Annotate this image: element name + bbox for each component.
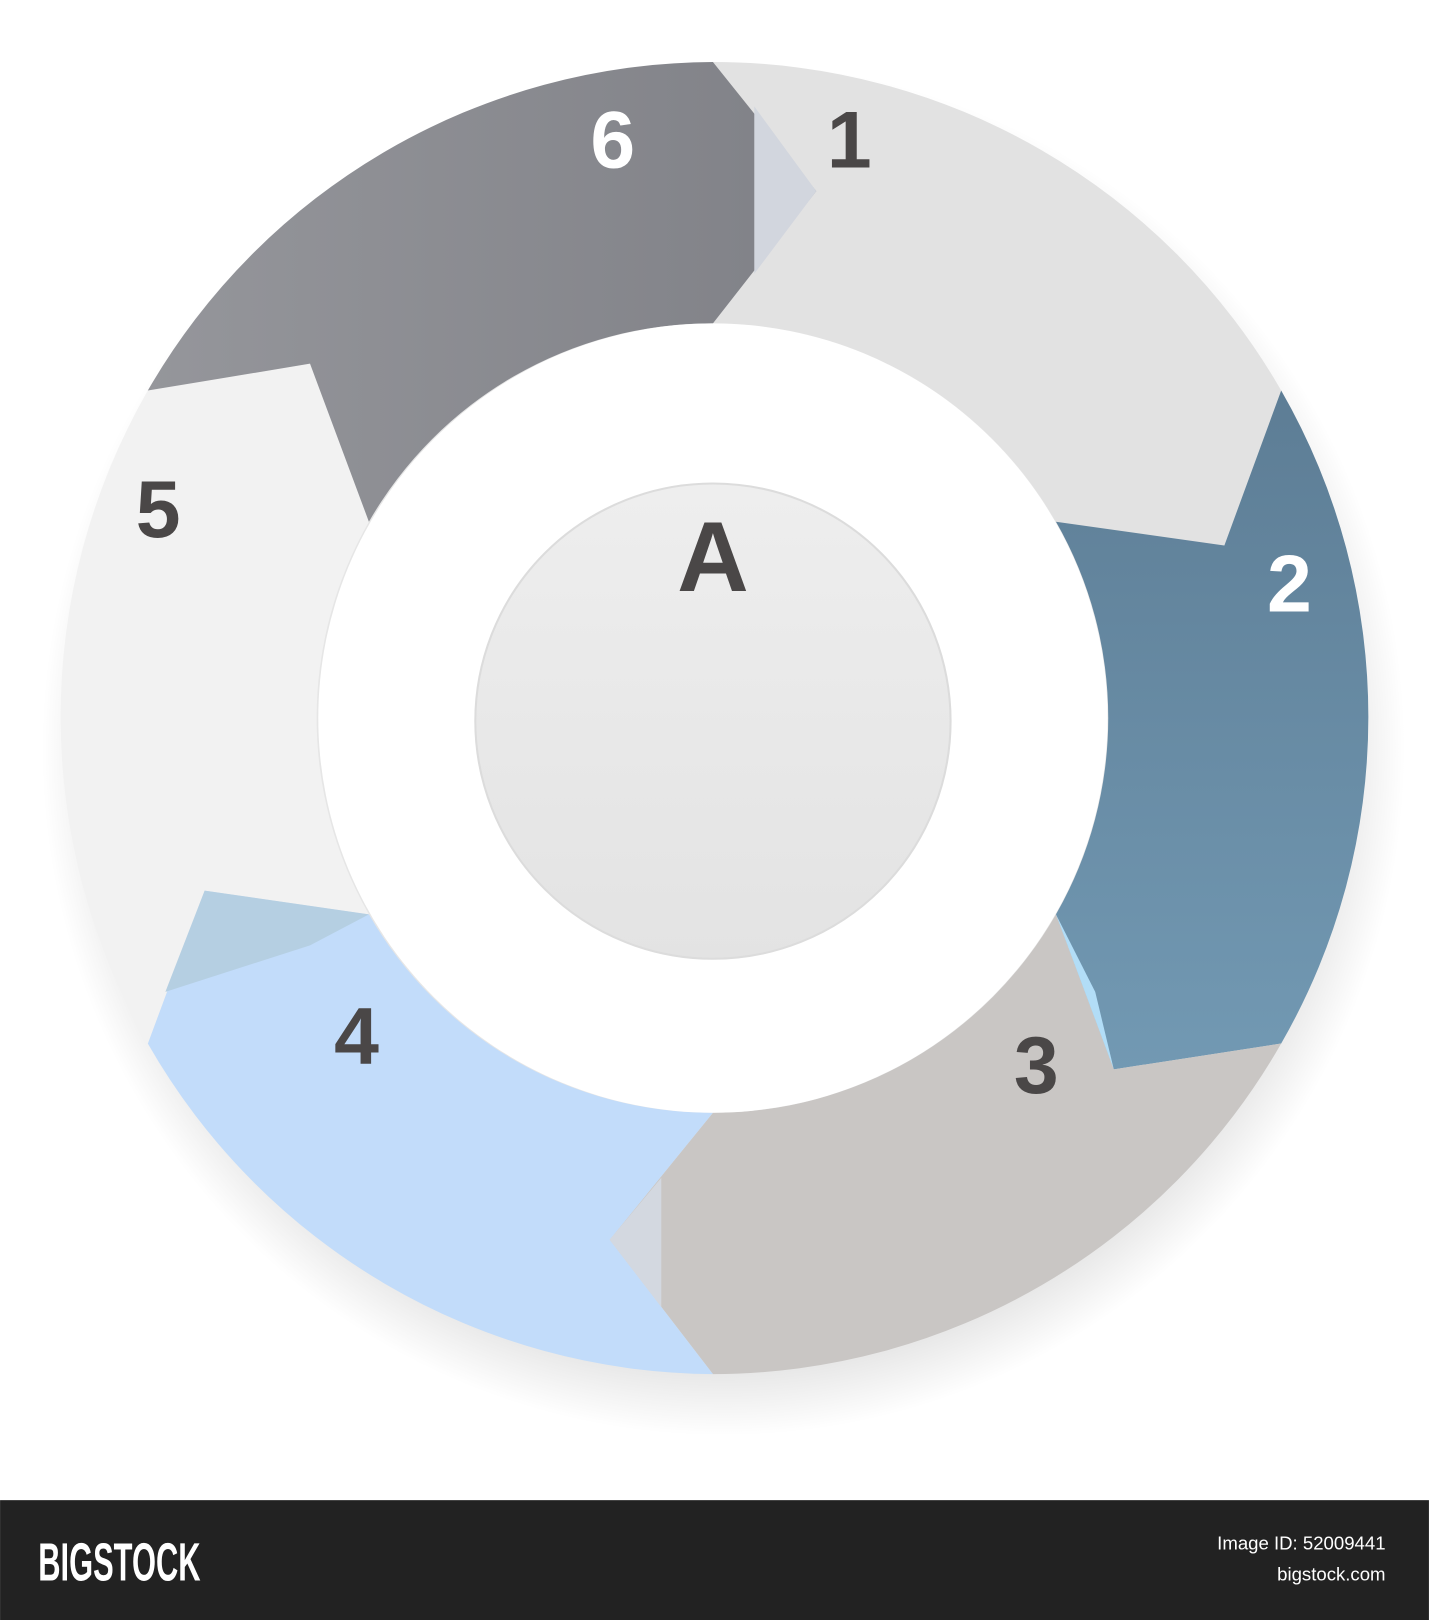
labels: 6	[590, 95, 635, 185]
diagram: cycle ring	[61, 62, 1368, 1374]
labels: 4	[334, 992, 379, 1082]
segment 2	[1056, 391, 1368, 1069]
footer bar: BIGSTOCK	[38, 1533, 201, 1593]
fold highlights	[754, 106, 816, 274]
center disc	[475, 484, 951, 959]
inner hole	[318, 323, 1108, 1113]
footer bar	[0, 1500, 1429, 1620]
labels: A	[677, 502, 749, 613]
segment 6	[148, 62, 816, 522]
labels: 3	[1014, 1021, 1059, 1111]
segment 4	[148, 891, 713, 1374]
labels: 1	[827, 95, 872, 185]
segment 5	[61, 364, 369, 1043]
labels: 2	[1267, 540, 1312, 630]
segment 1	[713, 62, 1281, 546]
labels: 5	[136, 465, 181, 555]
footer bar: bigstock.com	[1277, 1564, 1386, 1585]
footer bar: Image ID: 52009441	[1217, 1533, 1386, 1554]
labels	[136, 95, 1312, 1111]
segment 3	[610, 914, 1281, 1374]
